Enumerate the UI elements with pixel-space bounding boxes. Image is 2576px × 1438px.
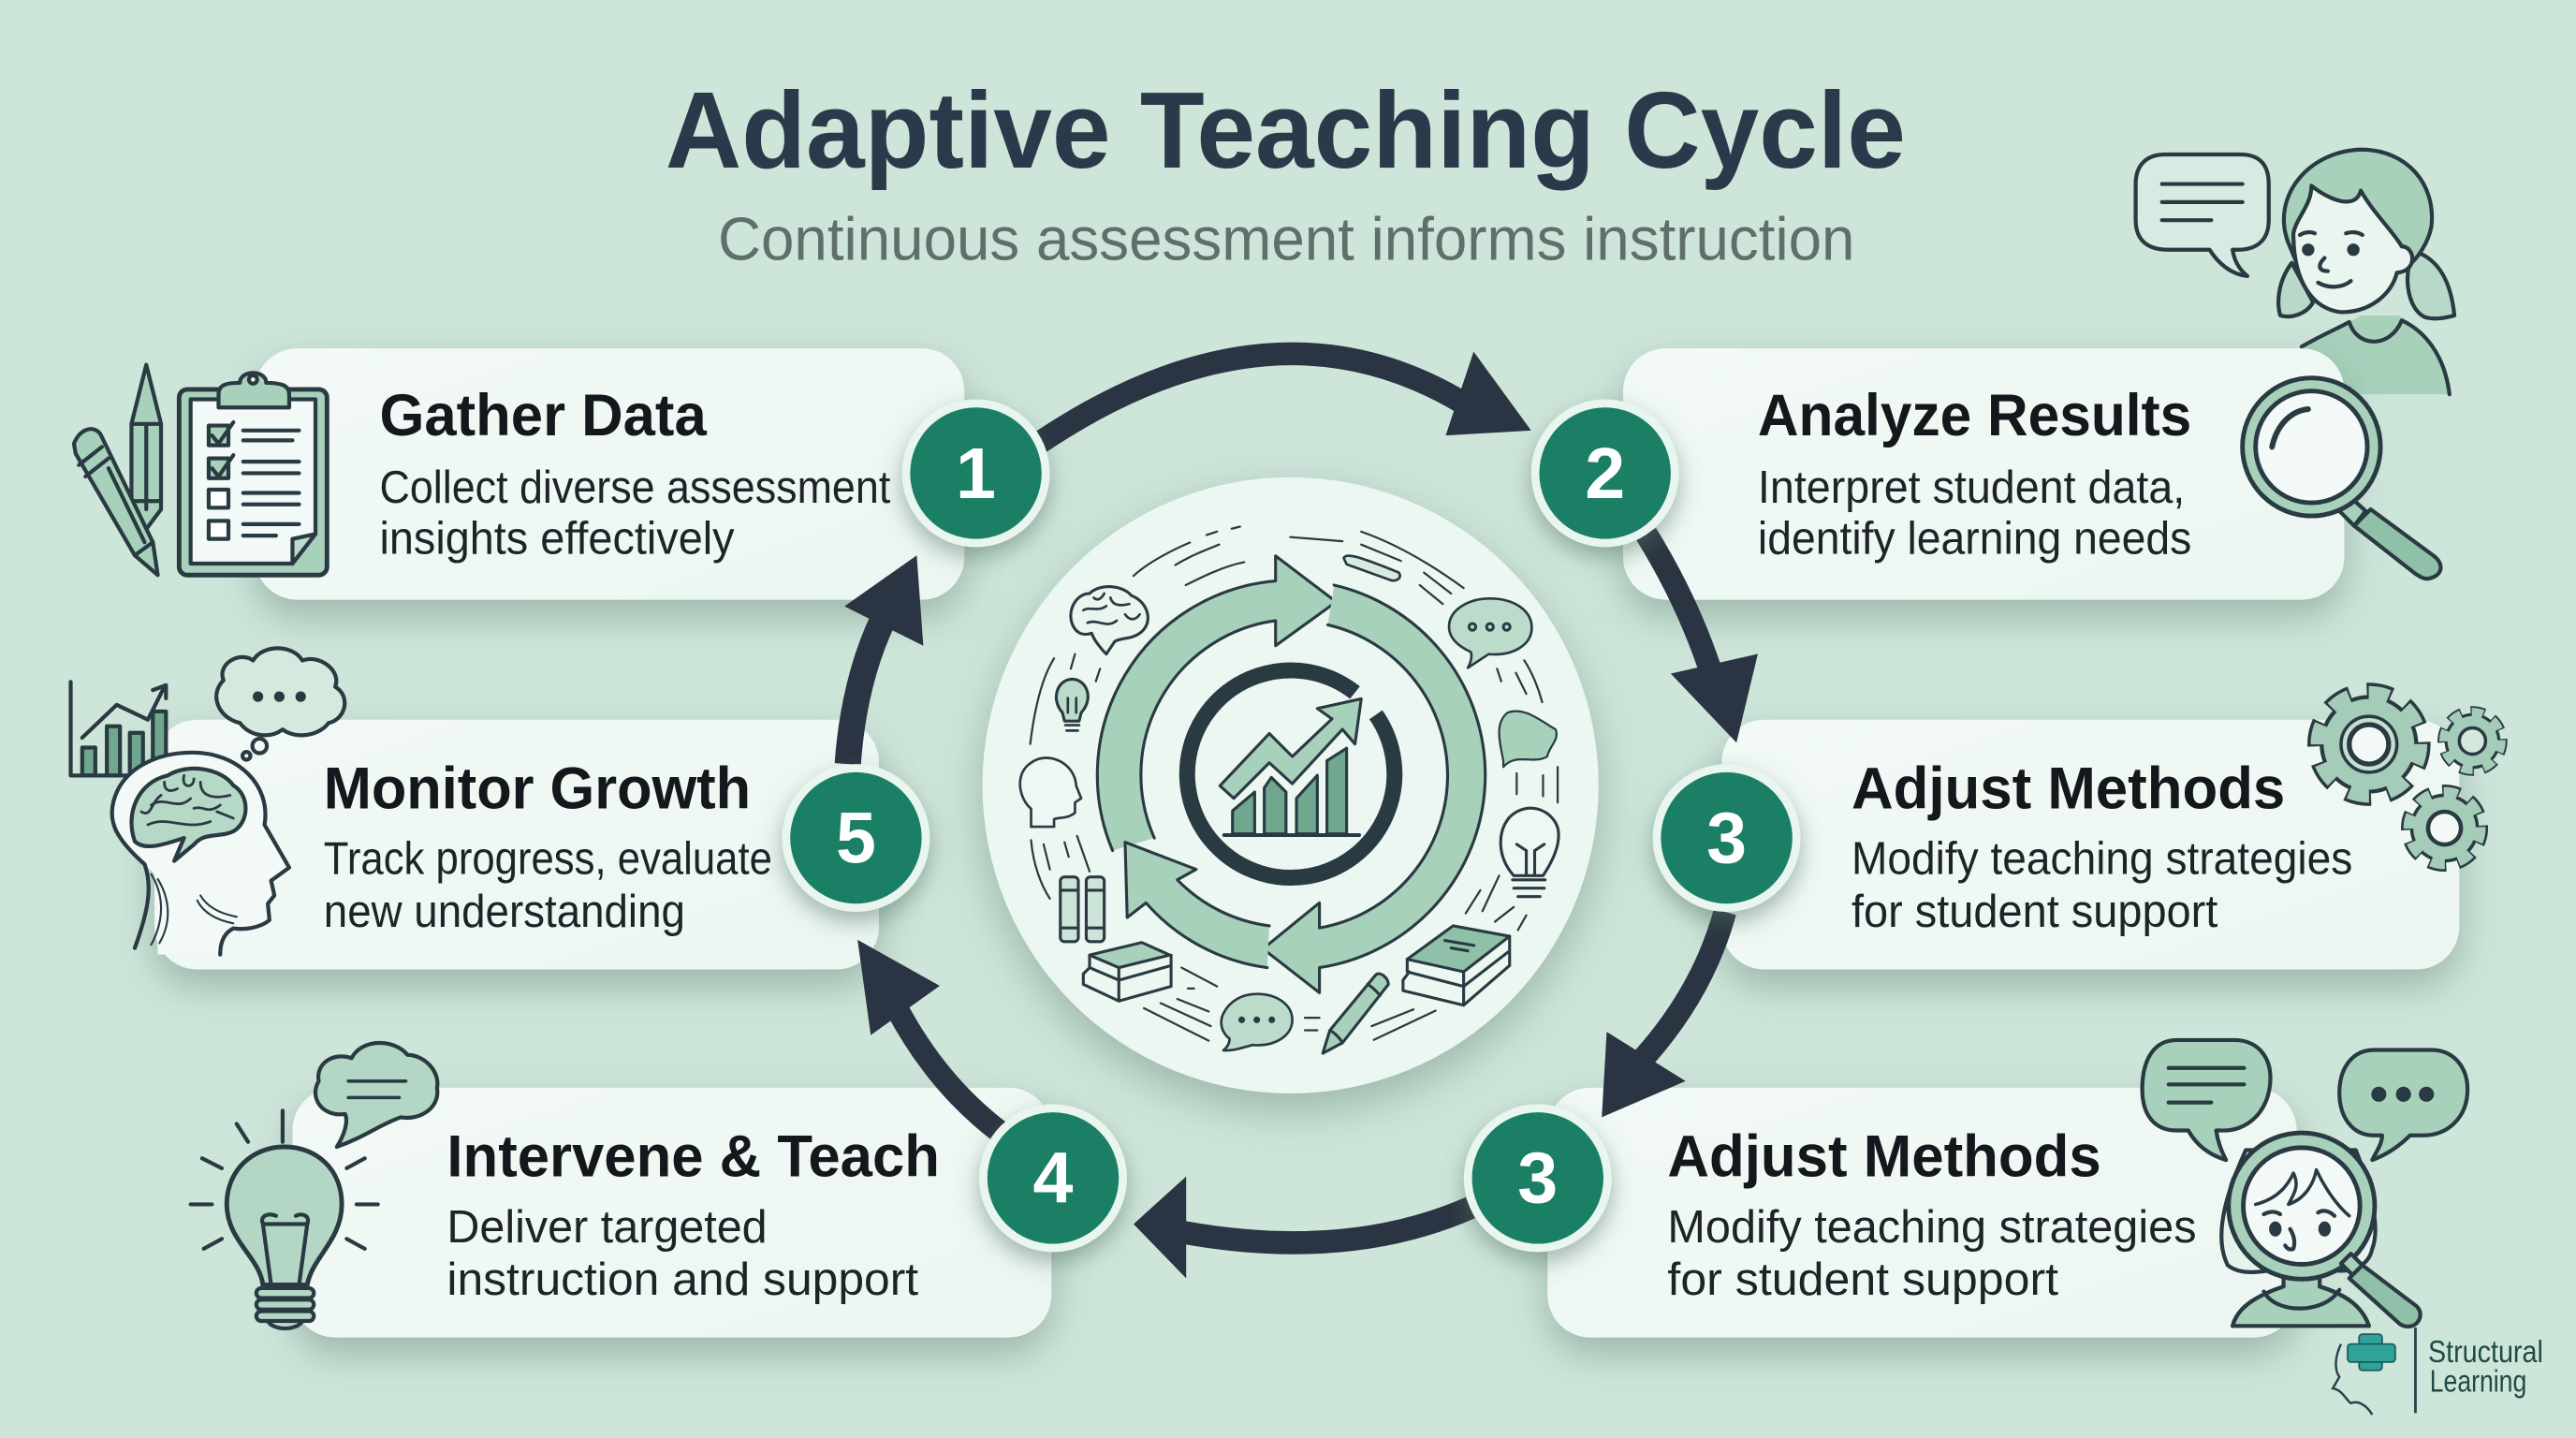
description: Modify teaching strategies: [1852, 834, 2352, 885]
head fill: [112, 753, 289, 955]
small icon: left book stack: [1083, 943, 1171, 1001]
clipboard board: [179, 389, 327, 575]
badge 3 upper: [1653, 764, 1801, 912]
speech bubble dots: [2339, 1049, 2467, 1160]
badge 5: [782, 764, 929, 912]
speech bubble lines: [2143, 1040, 2271, 1160]
hair: [2284, 150, 2432, 263]
badge 3 lower: [1464, 1104, 1612, 1252]
panel: intervene and teach: [292, 1088, 1051, 1338]
heading: Analyze Results: [1758, 383, 2191, 448]
heading: Adjust Methods: [1852, 756, 2285, 821]
small icon: bottom speech bubble: [1222, 994, 1293, 1050]
badge 4: [979, 1104, 1127, 1252]
hair: [2221, 1151, 2376, 1272]
lens face: [2243, 1147, 2361, 1265]
description: Deliver targeted: [446, 1202, 768, 1253]
small icon: eraser pencil: [1343, 556, 1400, 580]
icon: clipboard and pencils: [74, 365, 327, 575]
small icon: brain: [1071, 587, 1148, 654]
small icon: right bulb: [1500, 808, 1559, 897]
title: Adaptive Teaching Cycle: [666, 69, 1906, 191]
growth chart icon: [1220, 698, 1361, 835]
clip: [218, 373, 289, 407]
icon: head with brain and chart: [71, 648, 344, 955]
cycle arrow: right: [1263, 585, 1486, 992]
small gear bottom: [2408, 792, 2481, 864]
icon: student behind magnifier with speech bubbles: [2143, 1040, 2467, 1327]
badge 4: 4: [1033, 1138, 1074, 1219]
heading: Adjust Methods: [1667, 1124, 2101, 1190]
shoulders: [2232, 1265, 2369, 1326]
logo head and puzzle: [2333, 1334, 2395, 1415]
arrow: step 1 to 2: [1038, 352, 1531, 444]
small icon: right book stack: [1403, 926, 1510, 1005]
head outline: [112, 753, 289, 955]
icon: light bulb with speech cloud: [191, 1043, 437, 1328]
paper: [191, 399, 315, 564]
small icon: left bulb: [1056, 679, 1088, 730]
icon: magnifying glass: [2243, 378, 2440, 579]
large gear: [2318, 694, 2420, 795]
handle: [2354, 509, 2440, 579]
description line 2: for student support: [1852, 887, 2218, 937]
panel: adjust methods lower: [1547, 1088, 2297, 1338]
speech bubble with text lines: [2136, 154, 2269, 276]
arrow: step 3 to 3: [1602, 912, 1725, 1117]
center disc with cycle illustration: [983, 477, 1599, 1093]
arrow: step 3 to 4: [1134, 1177, 1471, 1278]
badge 5: 5: [836, 798, 876, 878]
cycle arrow: left: [1097, 556, 1336, 851]
base: [256, 1288, 314, 1328]
logo divider: [2414, 1328, 2417, 1413]
badge 3 upper: 3: [1706, 798, 1747, 878]
small icon: head profile: [1020, 757, 1081, 827]
subtitle: Continuous assessment informs instruction: [718, 204, 1854, 272]
bulb: [227, 1147, 342, 1284]
panel: adjust methods upper: [1721, 720, 2459, 969]
description line 2: new understanding: [324, 887, 685, 937]
decorative motion lines: [1031, 527, 1558, 1041]
inner ring: [1187, 670, 1395, 877]
diagonal pencil: [74, 429, 158, 575]
brain: [132, 769, 245, 861]
panel: analyze results: [1623, 348, 2344, 600]
bar chart: [71, 682, 171, 775]
vertical pencil: [131, 365, 161, 529]
logo text line 2: Learning: [2430, 1365, 2526, 1400]
logo text: Structural: [2428, 1335, 2543, 1370]
face: [2293, 185, 2412, 312]
small icon: pencil: [1323, 974, 1388, 1053]
description: Modify teaching strategies: [1667, 1202, 2197, 1253]
checklist: [209, 426, 228, 446]
arrow: step 4 to 5: [857, 940, 1003, 1134]
panel: monitor growth: [154, 720, 879, 969]
small icon: blob brain: [1500, 712, 1557, 767]
small icon: right speech bubble: [1449, 598, 1531, 668]
description: Interpret student data,: [1758, 462, 2185, 513]
heading: Gather Data: [379, 383, 708, 448]
handle: [2341, 1254, 2363, 1275]
pigtails: [2278, 252, 2454, 318]
badge 1: [902, 399, 1050, 547]
arrow: step 5 to 1: [844, 555, 923, 764]
description: Track progress, evaluate: [324, 834, 772, 885]
small icon: standing books: [1061, 877, 1105, 942]
lens: [2243, 378, 2380, 516]
cycle arrow: bottom: [1125, 843, 1269, 968]
logo: structural learning: [2333, 1328, 2543, 1415]
description line 2: for student support: [1667, 1255, 2058, 1305]
speech cloud: [315, 1043, 437, 1147]
neck lines: [152, 874, 237, 945]
badge 2: [1531, 399, 1679, 547]
description: Collect diverse assessment: [379, 462, 891, 513]
student body: [2302, 315, 2450, 394]
small gear top: [2444, 712, 2501, 770]
icon: student with speech bubble: [2136, 150, 2454, 394]
description line 2: insights effectively: [379, 513, 735, 564]
heading: Intervene & Teach: [446, 1124, 940, 1190]
heading: Monitor Growth: [324, 756, 751, 821]
badge 3 lower: 3: [1517, 1138, 1558, 1219]
icon: gears: [2318, 694, 2501, 864]
description line 2: identify learning needs: [1758, 513, 2191, 564]
arrow: step 2 to 3: [1647, 534, 1758, 742]
badge 1: 1: [956, 433, 996, 514]
rays: [191, 1110, 378, 1249]
description line 2: instruction and support: [446, 1255, 918, 1305]
thought cloud: [216, 648, 344, 735]
lens ring: [2236, 1140, 2367, 1271]
panel: gather data: [255, 348, 964, 600]
badge 2: 2: [1585, 433, 1625, 514]
